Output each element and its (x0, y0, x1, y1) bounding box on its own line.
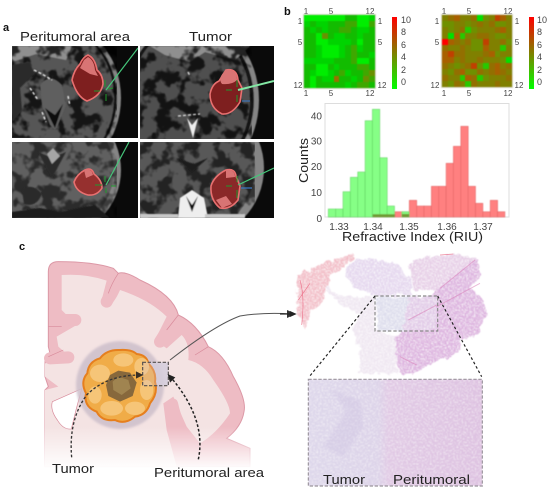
dashed arrow to peritumoral (172, 378, 200, 459)
colorbar 1: 6 (401, 40, 406, 50)
heatmap 2 axis labels: 12 (515, 81, 524, 90)
heatmap 1 axis labels: 5 (329, 89, 334, 98)
sulci (50, 283, 172, 358)
colorbar 1 (392, 15, 411, 89)
heatmap 2 axis labels: 12 (431, 81, 440, 90)
colorbar 2: 4 (537, 52, 542, 62)
panel label a: a (3, 22, 10, 34)
heatmap 2 axis labels: 1 (435, 17, 440, 26)
heatmap 2 axis labels: 1 (442, 7, 447, 16)
heatmap 1 axis labels: 5 (378, 38, 383, 47)
cortex (45, 262, 250, 467)
heatmap 1 axis labels: 5 (329, 7, 334, 16)
histology whole slide (280, 254, 487, 486)
zoom lines (309, 296, 482, 377)
heatmap 2 axis labels: 12 (504, 89, 513, 98)
MRI panel: tumor top (140, 46, 274, 139)
heatmap 2 axis labels (431, 7, 524, 98)
heatmap 1 axis labels: 1 (378, 17, 383, 26)
panel label c: c (19, 241, 25, 253)
x axis title: Refractive Index (RIU) (342, 230, 483, 244)
heatmap 1 axis labels: 1 (304, 89, 309, 98)
histogram: 1.34 (363, 222, 383, 233)
heatmap 1 axis labels: 1 (298, 17, 303, 26)
histogram: 1.37 (473, 222, 493, 233)
colorbar 1: 2 (401, 65, 406, 75)
heading: peritumoral area: Peritumoral area (20, 29, 131, 44)
heatmap 1 axis labels: 12 (366, 7, 375, 16)
heatmap 1 axis labels: 12 (294, 81, 303, 90)
ventricle (52, 389, 82, 429)
colorbar 2: 0 (537, 77, 542, 87)
selection box (143, 362, 168, 386)
heatmap 2 axis labels: 1 (442, 89, 447, 98)
histogram: 40 (311, 112, 322, 122)
histogram: 20 (311, 162, 322, 173)
colorbar 2: 6 (537, 40, 542, 50)
heatmap 2 axis labels: 1 (515, 17, 520, 26)
heatmap 2 axis labels: 5 (467, 7, 472, 16)
inset locator box (375, 296, 438, 331)
heatmap 2 (440, 13, 514, 88)
histogram: 10 (311, 188, 322, 199)
heatmap 1 (302, 13, 376, 90)
heatmap 1 axis labels: 5 (298, 38, 303, 47)
colorbar 1: 10 (401, 15, 411, 25)
histogram: 0 (316, 214, 322, 225)
heatmap 1 axis labels: 12 (366, 89, 375, 98)
brain illustration (40, 262, 260, 470)
heatmap 2 axis labels: 5 (515, 38, 520, 47)
heatmap 2 axis labels: 5 (435, 38, 440, 47)
histogram: 1.33 (329, 222, 349, 233)
histogram: 30 (311, 136, 322, 148)
heatmap 1 axis labels: 1 (304, 7, 309, 16)
colorbar 2 (529, 15, 547, 89)
histogram: 1.35 (399, 222, 419, 233)
panel label b: b (284, 6, 291, 18)
histology inset (308, 379, 482, 486)
selection shade (143, 362, 168, 386)
red histogram bars (373, 126, 505, 217)
heatmap 1 axis labels: 12 (378, 81, 387, 90)
heatmap 1 axis labels (294, 7, 387, 98)
colorbar 1: 8 (401, 27, 406, 37)
green histogram bars (328, 109, 409, 217)
histogram: 1.36 (437, 222, 457, 233)
y axis title: Counts (296, 137, 311, 183)
heatmap 2 axis labels: 5 (467, 89, 472, 98)
colorbar 1: 4 (401, 52, 406, 62)
peritumoral halo (76, 341, 164, 429)
tumor (83, 350, 156, 422)
heading: tumor: Tumor (189, 29, 233, 44)
inset label tumor: Tumor (323, 473, 365, 487)
colorbar 2: 2 (537, 65, 542, 75)
histogram (311, 104, 509, 233)
colorbar 1: 0 (401, 77, 406, 87)
label tumor: Tumor (52, 462, 94, 476)
dashed arrow to tumor (71, 375, 140, 457)
inset label peritumoral: Peritumoral (393, 473, 470, 487)
colorbar 2: 8 (537, 27, 542, 37)
connector arrow to histology (170, 310, 296, 360)
heatmap 2 axis labels: 12 (504, 7, 513, 16)
MRI panel: peritumoral top (12, 46, 138, 138)
MRI panel: peritumoral bottom (12, 142, 138, 218)
MRI panel: tumor bottom (140, 142, 274, 218)
colorbar 2: 10 (537, 15, 547, 25)
label peritumoral area: Peritumoral area (154, 466, 264, 480)
overlap bars (373, 214, 395, 217)
white matter (45, 275, 230, 467)
bottom fade (40, 427, 260, 470)
